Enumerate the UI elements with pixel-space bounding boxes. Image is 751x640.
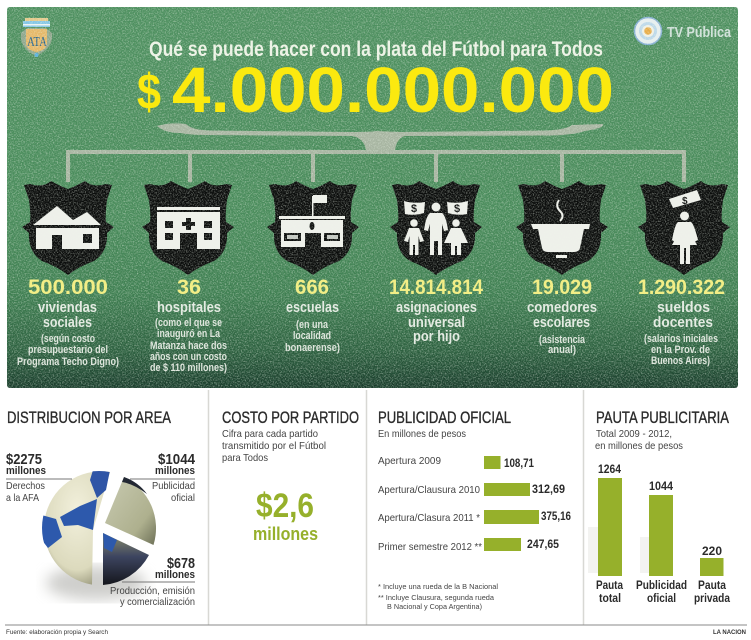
description — [222, 428, 326, 464]
column chart: Pauta — [596, 580, 624, 592]
bar chart: 108,71 — [504, 458, 535, 470]
stat: hospitales: años con un costo — [150, 351, 227, 363]
value: derechos: millones — [6, 465, 46, 477]
description: transmitido por el Fútbol — [222, 440, 326, 452]
panel: pauta publicitaria — [588, 408, 731, 605]
stat: viviendas: presupuestario del — [28, 344, 108, 356]
footnotes — [378, 582, 498, 611]
column chart: oficial — [647, 593, 676, 605]
stat: viviendas: sociales — [43, 314, 92, 331]
icon: hospital — [157, 207, 220, 249]
stat: escuelas: 666 — [295, 276, 329, 299]
shield: hospitales — [142, 181, 234, 275]
description: Cifra para cada partido — [222, 428, 318, 440]
bar chart: Apertura/Clasura 2011 * — [378, 512, 480, 524]
value: derechos: Derechos — [6, 480, 45, 492]
icon: family with money — [404, 201, 468, 255]
stat: asignaciones — [389, 276, 483, 345]
total amount: $ — [137, 64, 161, 120]
value: publicidad: millones — [155, 465, 195, 477]
stat: escuelas: localidad — [293, 330, 331, 342]
icon: AFA crest: ATA — [27, 35, 48, 50]
value: publicidad: oficial — [171, 492, 195, 504]
stat: hospitales: inauguró en La — [157, 328, 221, 340]
subtitle — [595, 428, 683, 452]
stat: escuelas: (en una — [296, 319, 329, 331]
icon: school — [279, 195, 345, 247]
icon: family with money: $ — [454, 203, 460, 215]
stat: comedores: 19.029 — [532, 276, 592, 299]
value: publicidad: Publicidad — [152, 480, 195, 492]
stat: comedores: anual) — [548, 344, 576, 356]
stat: hospitales — [150, 276, 227, 374]
panel: distribucion por area — [6, 408, 196, 608]
icon: TV Pública logo: TV Pública — [667, 24, 732, 41]
stat: sueldos: docentes — [653, 314, 713, 331]
value: produccion: Producción, emisión — [110, 585, 195, 597]
column chart — [588, 464, 731, 605]
description: para Todos — [222, 452, 268, 464]
bar chart: 247,65 — [527, 539, 560, 551]
bar chart: 312,69 — [532, 484, 565, 496]
stat: asignaciones: 14.814.814 — [389, 276, 483, 299]
stat: sueldos — [638, 276, 725, 367]
stat: comedores: escolares — [533, 314, 590, 331]
stat: hospitales: hospitales — [157, 299, 221, 316]
bar chart: Apertura 2009 — [378, 455, 441, 467]
footnotes: ** Incluye Clausura, segunda rueda — [378, 593, 495, 602]
panel: grass field — [7, 7, 738, 388]
stat: sueldos: Buenos Aires) — [651, 355, 710, 367]
stat: hospitales: (como el que se — [155, 317, 222, 329]
stat: hospitales: 36 — [177, 276, 201, 299]
subtitle: Total 2009 - 2012, — [596, 428, 672, 440]
value: produccion — [110, 555, 195, 608]
column chart: 1044 — [649, 481, 674, 493]
value: derechos: a la AFA — [6, 492, 39, 504]
icon: teacher with money: $ — [682, 196, 688, 207]
heading: DISTRIBUCION POR AREA — [7, 408, 172, 427]
grass speckle — [7, 7, 738, 388]
big number: millones — [253, 524, 318, 544]
bar chart: Primer semestre 2012 ** — [378, 541, 482, 553]
bar chart: Apertura/Clausura 2010 — [378, 484, 480, 496]
stat: escuelas: escuelas — [286, 299, 339, 316]
stat: comedores: comedores — [527, 299, 597, 316]
credit: LA NACION — [713, 629, 746, 636]
stat: hospitales: Matanza hace dos — [150, 340, 227, 352]
stat: viviendas: viviendas — [38, 299, 97, 316]
stat: sueldos: en la Prov. de — [651, 344, 710, 356]
column chart: 1264 — [598, 464, 622, 476]
panel: publicidad oficial — [378, 408, 571, 611]
stat: escuelas — [285, 276, 340, 354]
column chart: Pauta — [698, 580, 727, 592]
column chart: total — [599, 593, 621, 605]
panel: costo por partido — [222, 408, 359, 544]
stat: viviendas: 500.000 — [28, 276, 108, 299]
big number — [253, 487, 318, 544]
stat: viviendas: (según costo — [41, 333, 95, 345]
stat: escuelas: bonaerense) — [285, 342, 340, 354]
source: Fuente: elaboración propia y Search — [6, 629, 108, 636]
stat: sueldos: sueldos — [657, 299, 710, 316]
stat: asignaciones: por hijo — [413, 328, 460, 345]
stat: hospitales: de $ 110 millones) — [150, 362, 227, 374]
heading: COSTO POR PARTIDO — [222, 408, 359, 427]
value: publicidad: $1044 — [158, 451, 196, 468]
stat: asignaciones: asignaciones — [396, 299, 477, 316]
value: produccion: y comercialización — [120, 596, 195, 608]
column chart: Publicidad — [636, 580, 687, 592]
stat: comedores — [527, 276, 597, 356]
bar chart — [378, 455, 571, 553]
stat: viviendas: Programa Techo Digno) — [17, 356, 119, 368]
bracket connector — [68, 123, 684, 182]
heading: PUBLICIDAD OFICIAL — [378, 408, 511, 427]
value: produccion: millones — [155, 569, 195, 581]
chart: soccer ball pie — [38, 470, 156, 600]
column chart: privada — [694, 593, 731, 605]
stat: viviendas — [17, 276, 119, 368]
shield: comedores — [516, 181, 608, 275]
icon: TV Pública logo — [634, 18, 732, 44]
footnotes: * Incluye una rueda de la B Nacional — [378, 582, 498, 591]
total amount: 4.000.000.000 — [172, 54, 614, 126]
subtitle: En millones de pesos — [378, 428, 466, 440]
icon: house — [33, 206, 101, 249]
icon: family with money: $ — [411, 203, 417, 215]
shield: sueldos — [638, 181, 730, 275]
title: Qué se puede hacer con la plata del Fútbol para Todos — [149, 38, 603, 61]
stat: sueldos: 1.290.322 — [638, 276, 725, 299]
shield: asignaciones — [390, 181, 482, 275]
icon: AFA crest — [21, 18, 52, 57]
stat: sueldos: (salarios iniciales — [644, 333, 718, 345]
icon: cooking pot — [531, 200, 590, 258]
shield: viviendas — [22, 181, 114, 275]
subtitle: en millones de pesos — [595, 440, 683, 452]
value: derechos — [6, 451, 72, 504]
value: publicidad — [130, 451, 196, 504]
value: derechos: $2275 — [6, 451, 42, 468]
footnotes: B Nacional y Copa Argentina) — [387, 602, 482, 611]
bar chart: 375,16 — [541, 511, 571, 523]
value: produccion: $678 — [167, 555, 195, 572]
stat: comedores: (asistencia — [539, 334, 586, 346]
shield: escuelas — [267, 181, 359, 275]
column chart: 220 — [702, 546, 722, 558]
stat: asignaciones: universal — [408, 314, 465, 331]
big number: $2,6 — [256, 487, 314, 525]
